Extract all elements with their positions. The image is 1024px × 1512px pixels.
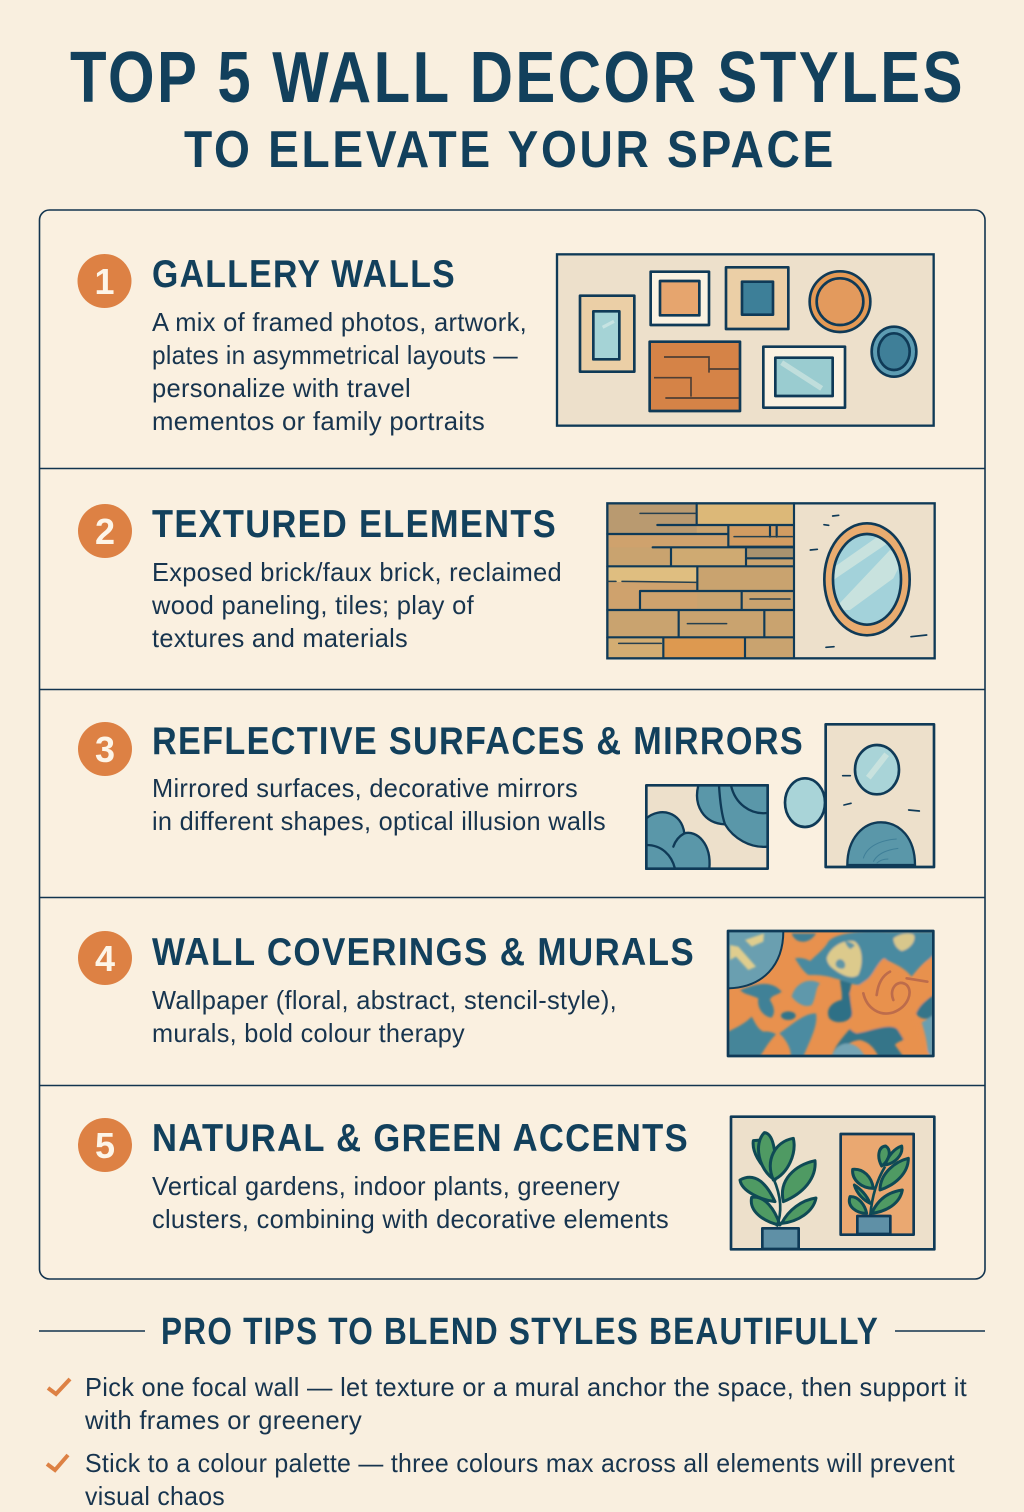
tip 2 [47,1448,955,1511]
number badge 3: 3 [95,729,115,770]
heading: textured elements: TEXTURED ELEMENTS [152,503,557,546]
icon: check mark [48,1379,70,1394]
panel: wall coverings and murals [78,931,935,1057]
heading: wall coverings and murals: WALL COVERINGS & MURALS [152,931,695,974]
text: wall coverings description: Wallpaper (floral, abstract, stencil-style), [152,985,617,1015]
illustration: potted plants [731,1117,934,1249]
heading: natural and green accents: NATURAL & GREEN ACCENTS [152,1117,689,1160]
panel: gallery walls [78,253,934,436]
text: textured elements description: textures and materials [152,623,408,653]
section heading: pro tips: PRO TIPS TO BLEND STYLES BEAUTIFULLY [161,1311,879,1353]
text: natural accents description [152,1171,669,1234]
text: reflective surfaces description: Mirrored surfaces, decorative mirrors [152,773,578,803]
text: gallery walls description: plates in asymmetrical layouts — [152,340,518,370]
text: gallery walls description [152,307,527,436]
icon: check mark [47,1455,68,1470]
number badge 2 [78,504,132,558]
number badge 5: 5 [95,1125,115,1166]
tip 1: with frames or greenery [84,1405,362,1435]
text: reflective surfaces description [152,773,606,836]
heading: gallery walls: GALLERY WALLS [152,253,456,296]
illustration: mirrors and scalloped shapes [646,724,934,869]
panel: natural and green accents [78,1117,934,1249]
text: gallery walls description: personalize with travel [152,373,411,403]
text: gallery walls description: mementos or family portraits [152,406,485,436]
number badge 2: 2 [95,511,115,552]
tip 2: Stick to a colour palette — three colours max across all elements will prevent [85,1448,955,1478]
text: gallery walls description: A mix of framed photos, artwork, [152,307,527,337]
illustration: floral mural [728,931,935,1057]
number badge 4 [78,931,132,985]
text: natural accents description: clusters, combining with decorative elements [152,1204,669,1234]
panel: reflective surfaces and mirrors [78,720,934,869]
illustration: brick wall and oval mirror [607,503,935,658]
text: reflective surfaces description: in different shapes, optical illusion walls [152,806,606,836]
text: wall coverings description [152,985,617,1048]
text: textured elements description [151,557,562,653]
number badge 5 [78,1118,132,1172]
panel: five wall decor styles [40,210,985,1279]
panel: textured elements [78,503,935,658]
illustration: gallery wall frames [557,254,934,426]
text: textured elements description: Exposed brick/faux brick, reclaimed [152,557,562,587]
number badge 1: 1 [94,261,115,302]
text: textured elements description: wood paneling, tiles; play of [151,590,474,620]
text: natural accents description: Vertical gardens, indoor plants, greenery [152,1171,620,1201]
tip 1: Pick one focal wall — let texture or a mural anchor the space, then support it [85,1372,967,1402]
heading: reflective surfaces and mirrors: REFLECTIVE SURFACES & MIRRORS [152,720,804,763]
number badge 3 [78,722,132,776]
subtitle: TO ELEVATE YOUR SPACE [184,121,836,179]
number badge 1 [78,254,132,308]
tip 1 [48,1372,967,1435]
text: wall coverings description: murals, bold colour therapy [152,1018,465,1048]
number badge 4: 4 [95,938,115,979]
tip 2: visual chaos [85,1481,225,1511]
